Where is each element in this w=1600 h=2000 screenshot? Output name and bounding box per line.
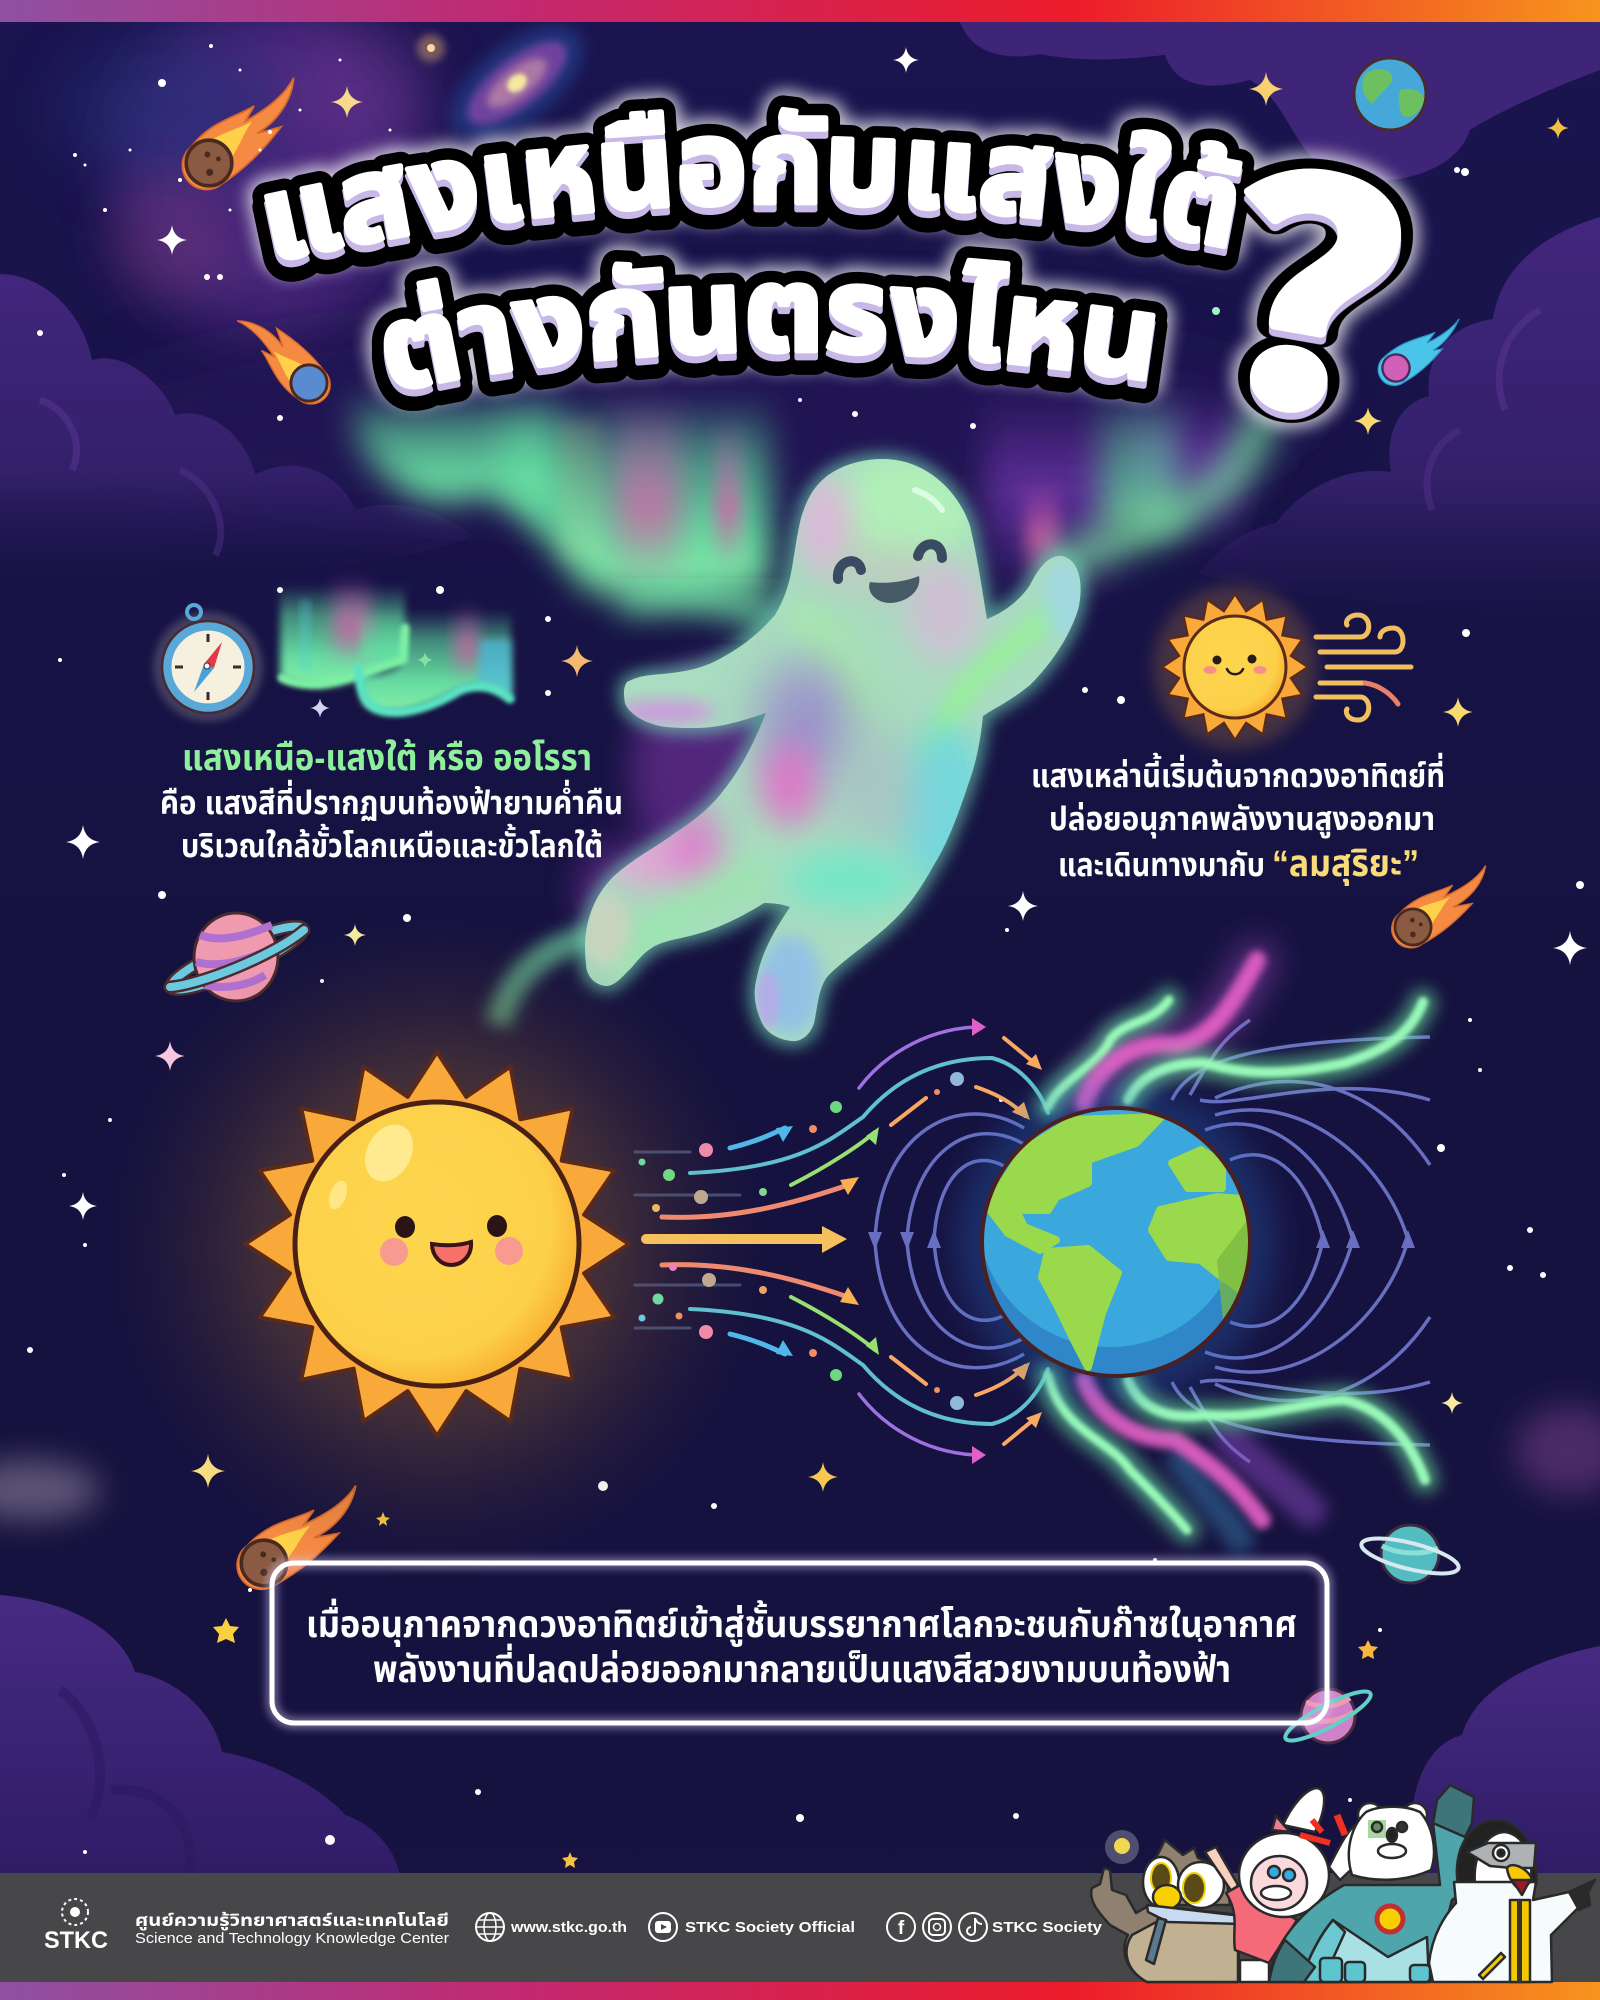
earth	[956, 1082, 1276, 1402]
small aurora ribbon icon	[280, 575, 511, 712]
purple cloud: right	[1199, 217, 1600, 625]
sun face	[380, 1215, 523, 1266]
magnetic field lines	[868, 1020, 1430, 1462]
title: ต่างกันตรงไหน	[372, 246, 1168, 382]
text: solar wind explanation: และเดินทางมากับ	[1058, 846, 1265, 883]
title: แสงเหนือกับแสงใต้	[252, 122, 1254, 282]
big sun	[107, 914, 767, 1574]
planet: pink ringed bottom	[1280, 1684, 1376, 1748]
social icons	[887, 1913, 1103, 1941]
purple cloud: bottom right	[1409, 1646, 1600, 1875]
social icons: STKC Society	[992, 1919, 1103, 1936]
small sun icon with wind	[1153, 585, 1411, 749]
ghost character	[560, 440, 1100, 1060]
purple cloud: bottom left	[0, 1595, 400, 1875]
callout text: พลังงานที่ปลดปล่อยออกมากลายเป็นแสงสีสวยงามบนท้องฟ้า	[373, 1643, 1231, 1690]
social icons: f	[898, 1918, 905, 1939]
meteor: left	[225, 303, 340, 412]
ghost face	[838, 544, 942, 603]
youtube	[649, 1913, 855, 1941]
footer band	[0, 1873, 1600, 2000]
title: ?	[1184, 46, 1441, 506]
mascot: rabbit	[1226, 1788, 1372, 1982]
meteor: bottom	[227, 1468, 375, 1602]
text: solar wind explanation: แสงเหล่านี้เริ่มต้นจากดวงอาทิตย์ที่	[1031, 752, 1445, 794]
aurora behind ghost	[350, 390, 1262, 1025]
callout text: เมื่ออนุภาคจากดวงอาทิตย์เข้าสู่ชั้นบรรยากาศโลกจะชนกับก๊าซในอากาศ	[306, 1598, 1297, 1647]
earth aurora strands	[1048, 960, 1425, 1540]
meteor: right	[1384, 852, 1501, 958]
text: aurora definition: แสงเหนือ-แสงใต้ หรือ ออโรรา	[182, 737, 592, 778]
compass icon	[153, 605, 263, 722]
mascots	[1091, 1785, 1595, 1982]
mascot: lightbulb	[1105, 1830, 1139, 1864]
organisation name: Science and Technology Knowledge Center	[135, 1930, 449, 1947]
title: แสงเหนือกับแสงใต้	[252, 95, 1254, 225]
purple cloud: left	[0, 274, 472, 580]
mascot: polar bear	[1269, 1785, 1480, 1982]
title: ต่างกันตรงไหน	[384, 269, 1156, 396]
website	[476, 1913, 627, 1941]
title	[236, 46, 1441, 513]
title: ?	[1184, 46, 1441, 506]
organisation name	[135, 1911, 449, 1947]
callout text	[306, 1598, 1297, 1690]
planet: earth top right	[1354, 58, 1426, 130]
title: แสงเหนือกับแสงใต้	[264, 118, 1243, 268]
title: ?	[1184, 46, 1441, 506]
youtube: STKC Society Official	[685, 1919, 855, 1936]
callout box	[272, 1563, 1327, 1723]
meteor: blue	[1372, 305, 1469, 393]
meteor: top left	[172, 62, 314, 202]
top gradient bar	[0, 0, 1600, 22]
organisation name: ศูนย์ความรู้วิทยาศาสตร์และเทคโนโลยี	[135, 1911, 449, 1931]
text: solar wind explanation: ปล่อยอนุภาคพลังงานสูงออกมา	[1049, 800, 1435, 839]
title: ?	[1184, 53, 1441, 513]
logo: STKC	[44, 1927, 108, 1954]
rabbit arm	[1205, 1847, 1238, 1892]
title: แสงเหนือกับแสงใต้	[236, 79, 1270, 288]
text: solar wind explanation	[1031, 752, 1445, 886]
mascot: penguin	[1429, 1820, 1595, 1982]
text: aurora definition: คือ แสงสีที่ปรากฏบนท้องฟ้ายามค่ำคืน	[160, 779, 623, 821]
website: www.stkc.go.th	[510, 1919, 627, 1936]
galaxy	[432, 5, 602, 161]
title: แสงเหนือกับแสงใต้	[264, 106, 1243, 260]
title: ต่างกันตรงไหน	[354, 232, 1184, 418]
solar wind arrows	[635, 1018, 1048, 1464]
text: aurora definition	[160, 737, 623, 864]
planet: pink ringed left	[166, 913, 308, 1001]
purple cloud: top right	[960, 22, 1600, 181]
title: ต่างกันตรงไหน	[384, 258, 1156, 390]
mascot: owl	[1091, 1840, 1242, 1982]
logo	[44, 1899, 108, 1954]
planet: teal ringed bottom right	[1358, 1525, 1462, 1583]
title: ต่างกันตรงไหน	[372, 270, 1168, 411]
text: solar wind explanation: “ลมสุริยะ”	[1272, 843, 1419, 886]
text: aurora definition: บริเวณใกล้ขั้วโลกเหนือและขั้วโลกใต้	[181, 823, 603, 864]
